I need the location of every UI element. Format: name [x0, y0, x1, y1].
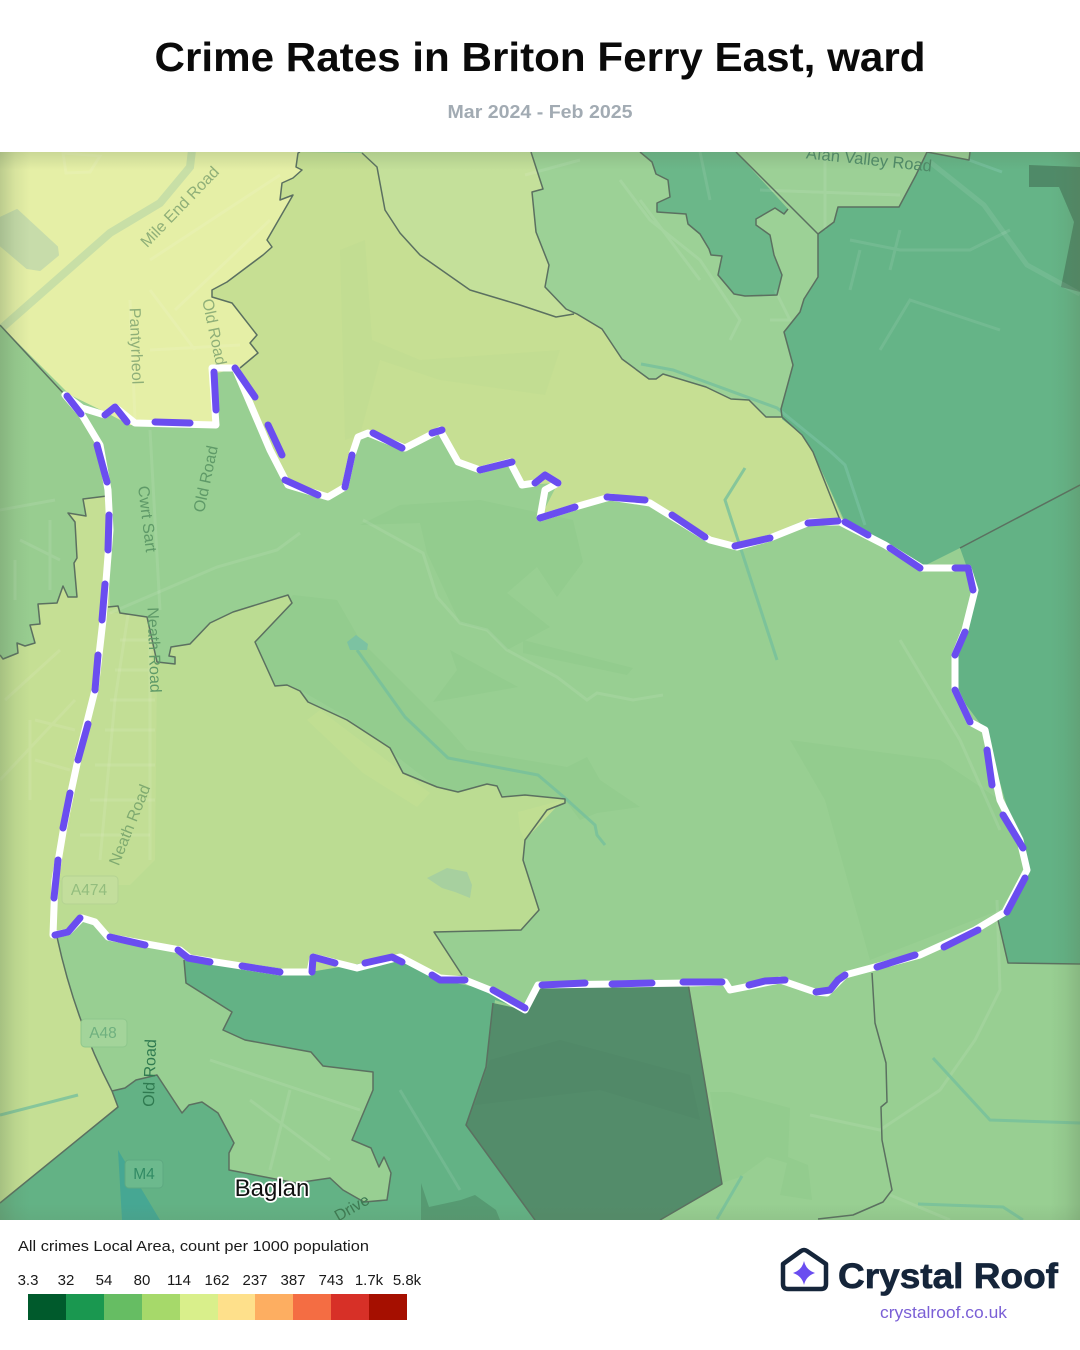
legend scale labels: 387 [280, 1272, 306, 1289]
icon: house with star [783, 1250, 826, 1289]
road label: Old Road centre: Old Road [191, 444, 222, 514]
area: south dark green [0, 957, 535, 1220]
area: north-east dark green [781, 152, 1080, 568]
wordmark: Crystal Roof [838, 1257, 1058, 1296]
area: north dark green pocket [640, 152, 788, 296]
legend scale labels: 1.7k [355, 1272, 384, 1289]
legend scale labels: 54 [96, 1272, 112, 1289]
legend scale labels: 80 [134, 1272, 150, 1289]
legend colour ramp [28, 1294, 407, 1320]
road label: Pantyrheol: Pantyrheol [126, 307, 145, 385]
area: south darkest [466, 983, 722, 1220]
vignette [0, 152, 1080, 1220]
road badge: M4 [125, 1160, 163, 1188]
pond [427, 868, 472, 898]
road label: Neath Road north: Neath Road [144, 607, 163, 693]
area: darkest inner shade [475, 1040, 700, 1120]
road badge: A474 [62, 876, 118, 904]
legend title: All crimes Local Area, count per 1000 population [18, 1238, 369, 1255]
subtitle: date range: Mar 2024 - Feb 2025 [448, 101, 632, 122]
ward boundary: purple dashes [54, 368, 1025, 1008]
title: Crime Rates in Briton Ferry East, ward [154, 34, 926, 80]
road badge: M4: M4 [133, 1166, 155, 1183]
road badge: A48 [81, 1019, 127, 1047]
map base colour [0, 152, 1080, 1220]
ward terrain patches [255, 500, 1025, 1200]
teal motorway patch [118, 1150, 160, 1220]
area: west light green strip [0, 496, 118, 1203]
legend scale labels: 743 [318, 1272, 344, 1289]
logo: Crystal Roof [783, 1250, 1058, 1322]
canal [3, 150, 192, 327]
reservoir [0, 210, 58, 270]
area: north centre light green [362, 152, 574, 317]
road label: Drive: Drive [332, 1192, 373, 1225]
area boundary lines [0, 152, 1080, 1220]
legend scale labels: 114 [167, 1272, 191, 1289]
legend scale labels: 162 [204, 1272, 230, 1289]
area: north light green band [212, 152, 842, 542]
legend scale labels: 3.3 [18, 1272, 38, 1289]
area: south dark woodland [421, 1183, 500, 1220]
area: ward built-up strip [60, 879, 61, 880]
area: pale meadow patches [530, 808, 556, 835]
area: ward south-west light green [55, 595, 565, 980]
legend scale labels: 5.8k [393, 1272, 422, 1289]
area: east dark green [955, 485, 1080, 964]
legend scale labels: 237 [242, 1272, 268, 1289]
road label: Old Road north: Old Road [198, 297, 229, 367]
road label: Neath Road south: Neath Road [107, 782, 154, 868]
road badge: A474: A474 [71, 882, 107, 899]
road label: Mile End Road: Mile End Road [138, 164, 223, 251]
area: north band shade [340, 240, 560, 440]
ward boundary: white line [53, 368, 1027, 1010]
river pond [347, 635, 368, 650]
area: north mid green [531, 152, 818, 417]
area: top small light box [932, 152, 970, 159]
area: south-west green [57, 918, 391, 1202]
website link text: crystalroof.co.uk [880, 1304, 1008, 1322]
roads [0, 152, 1080, 1220]
area: top-right darkest corner [1029, 165, 1080, 292]
area: top mid green [736, 152, 927, 234]
area: north-west yellow [0, 152, 302, 425]
road label: Cwrt Sart: Cwrt Sart [134, 485, 159, 554]
legend scale labels: 32 [58, 1272, 74, 1289]
road label: Old Road south: Old Road [141, 1039, 160, 1107]
road label: Afan Valley Road: Afan Valley Road [805, 144, 933, 176]
legend [18, 1238, 422, 1320]
rivers [0, 160, 1080, 1220]
area: west green [0, 325, 110, 659]
legend scale labels [18, 1272, 422, 1289]
road badge: A48: A48 [89, 1025, 117, 1042]
place label: Baglan: Baglan [235, 1175, 309, 1202]
